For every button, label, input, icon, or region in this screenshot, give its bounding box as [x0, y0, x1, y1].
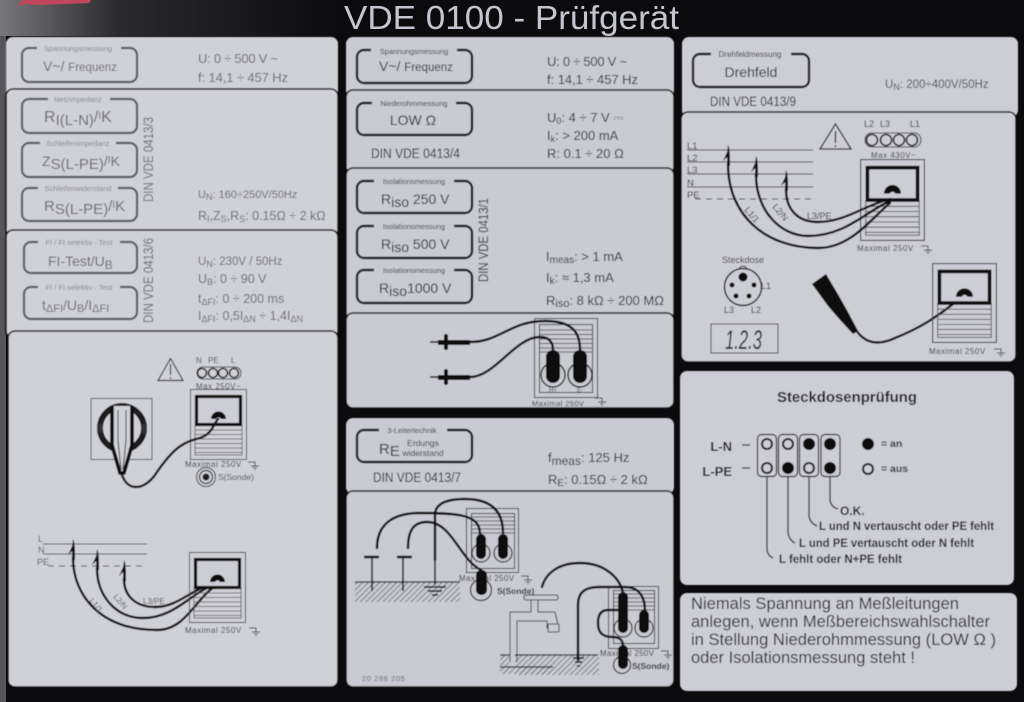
warning text: Niemals Spannung an Meßleitungen — [691, 594, 959, 613]
impedance ranges: U — [198, 189, 206, 201]
connector sockets: N — [196, 356, 202, 365]
red sticker remnant — [17, 0, 91, 6]
button: Riso 1000 V — [357, 266, 472, 303]
meter back: H+ — [549, 388, 557, 394]
button: RI — [22, 95, 137, 133]
button: Riso 250 V: R — [381, 191, 391, 207]
meter rating label: Maximal 250V — [929, 347, 986, 356]
button: Riso 1000 V: R — [379, 280, 389, 296]
button: tΔFI: t — [42, 297, 46, 313]
panel: rotary diagram — [681, 112, 1016, 362]
impedance ranges: : 0.15Ω ÷ 2 kΩ — [245, 209, 326, 223]
button: RS — [22, 184, 137, 221]
earth ranges: E — [557, 478, 564, 489]
result texts: L und PE vertauscht oder N fehlt — [799, 538, 974, 550]
meter rating label — [532, 398, 606, 408]
icon: warning triangle — [158, 358, 183, 380]
panel: rotary field — [682, 37, 1018, 117]
lamp legend — [862, 438, 908, 475]
meter rating label — [857, 244, 932, 254]
result texts — [779, 504, 994, 566]
impedance ranges: ,R — [227, 209, 239, 223]
left column — [6, 37, 338, 687]
button: Riso 500 V — [357, 222, 472, 258]
meter front — [190, 552, 246, 622]
part number: 20 286 205 — [362, 674, 406, 683]
button: RS: S(L-PE) — [55, 201, 108, 218]
meter rating label: Maximal 250V — [185, 460, 242, 469]
button: RI: I(L-N) — [56, 112, 94, 129]
rotary voltage range: : 200÷400V/50Hz — [900, 79, 989, 91]
button: ZS: Z — [42, 153, 51, 169]
phase sequence display — [711, 324, 778, 355]
low ohm ranges: U — [547, 110, 556, 125]
FI ranges: U — [198, 256, 206, 268]
meter back: E- — [577, 388, 583, 394]
insulation ranges: I — [546, 249, 550, 264]
indicator lamp columns — [758, 434, 840, 476]
panel: FI test — [6, 230, 338, 338]
probe socket right — [614, 645, 669, 674]
probe socket right: S(Sonde) — [632, 661, 669, 671]
warning triangle — [820, 124, 851, 149]
button: Riso 500 V: 500 V — [409, 236, 450, 252]
button: RE: 3-Leitertechnik — [387, 426, 437, 435]
panel: low ohm — [346, 90, 674, 174]
button: V~/Frequenz: Spannungsmessung — [44, 44, 112, 53]
meter rating label: Maximal 250V — [185, 626, 242, 635]
test clips and leads: L2/N — [770, 202, 790, 223]
test clips and leads: L3/PE — [143, 597, 165, 606]
lamp legend: = aus — [881, 463, 908, 475]
earth ranges: R — [548, 472, 557, 487]
warning text: oder Isolationsmessung steht ! — [691, 648, 915, 667]
insulation ranges: meas — [550, 255, 574, 266]
row labels — [702, 439, 750, 479]
rotary voltage range: N — [893, 82, 900, 92]
button: tΔFI: ΔFI — [92, 303, 109, 315]
insulation ranges: : ≈ 1,3 mA — [555, 270, 614, 285]
connector sockets — [864, 119, 921, 160]
panel: voltage measurement left — [6, 37, 338, 97]
button: V~/Frequenz: V~/ Frequenz — [43, 58, 117, 74]
panel: socket test — [680, 371, 1014, 585]
test clips and leads — [68, 539, 214, 630]
warning text: anlegen, wenn Meßbereichswahlschalter — [691, 612, 990, 631]
meter back — [466, 508, 518, 572]
mains conductors: PE — [687, 190, 700, 201]
button: RE: R — [379, 441, 390, 458]
insulation ranges: R — [546, 293, 555, 308]
insulation ranges: k — [550, 276, 556, 287]
meter front — [861, 160, 924, 240]
meter rating label — [600, 649, 672, 659]
button: tΔFI: /I — [84, 297, 92, 313]
connector sockets: L — [231, 356, 236, 365]
button: RE: widerstand — [401, 448, 444, 458]
cable from plug to meter — [122, 419, 218, 487]
panel: left diagrams — [8, 331, 338, 687]
title: VDE 0100 - Prüfgerät — [344, 0, 679, 36]
earth ranges: f — [548, 450, 552, 465]
connector sockets: PE — [208, 356, 219, 365]
panel: insulation — [346, 168, 674, 320]
test clips and leads: L2/N — [111, 593, 129, 611]
mains conductors: L2 — [687, 153, 698, 164]
right column — [680, 37, 1018, 691]
low ohm ranges: k — [551, 134, 556, 144]
connector sockets — [196, 356, 241, 391]
probe socket left — [470, 570, 534, 600]
faucet — [510, 595, 559, 662]
probe socket left: S(Sonde) — [497, 586, 534, 596]
impedance ranges: R — [198, 209, 207, 223]
mains conductors: N — [687, 178, 694, 189]
mains conductors: L — [38, 534, 43, 544]
heading: Steckdosenprüfung — [777, 390, 917, 406]
panel: warning note — [680, 593, 1017, 691]
mains conductors: L1 — [687, 141, 698, 152]
wall socket front: Steckdose — [722, 255, 764, 265]
FI ranges: : 0 ÷ 90 V — [213, 272, 267, 286]
connector sockets: Max 250V~ — [196, 382, 241, 391]
impedance ranges — [198, 189, 326, 224]
wall socket front: L2 — [751, 305, 761, 315]
insulation ranges — [546, 249, 664, 310]
button: ZS: S(L-PE) — [51, 156, 104, 173]
voltage and frequency ranges: f: 14,1 ÷ 457 Hz — [547, 72, 638, 87]
button: Riso 1000 V: 1000 V — [407, 280, 452, 296]
meter rating label: Maximal 250V — [857, 244, 914, 253]
mains conductors: L3 — [687, 165, 698, 176]
FI ranges: U — [198, 272, 207, 286]
cables left — [377, 499, 503, 570]
FI ranges: t — [198, 292, 201, 306]
standard label 0413/1: DIN VDE 0413/1 — [475, 198, 491, 282]
low ohm ranges: : 4 ÷ 7 V ⎓ — [561, 110, 624, 125]
button: ZS: Schleifenimpedanz — [46, 139, 110, 148]
button: RI: K — [101, 109, 112, 126]
voltage and frequency ranges — [547, 54, 638, 87]
button: RS: K — [115, 198, 125, 215]
impedance ranges: S — [221, 214, 227, 224]
button: Riso 1000 V: iso — [389, 283, 407, 299]
low ohm ranges — [547, 110, 624, 161]
button: RS: R — [44, 198, 55, 215]
test clips and leads: L1/1 — [742, 205, 761, 225]
meter rating label — [459, 574, 532, 584]
mains conductors: PE — [37, 557, 49, 567]
button: V~/Frequenz — [22, 44, 137, 82]
row labels: L-N — [710, 439, 732, 454]
impedance ranges: I — [207, 214, 210, 224]
button: RI: I — [98, 111, 101, 122]
connector sockets: Max 430V~ — [871, 151, 916, 160]
standard label 0413/9: DIN VDE 0413/9 — [710, 93, 796, 109]
insulation ranges: : 8 kΩ ÷ 200 MΩ — [569, 293, 664, 308]
panel: impedance — [6, 89, 338, 237]
button: V~/Frequenz: Spannungsmessung — [380, 47, 448, 56]
FI ranges: : 230V / 50Hz — [213, 256, 283, 268]
button: V~/Frequenz — [357, 46, 472, 83]
button: Riso 500 V: R — [381, 236, 391, 252]
insulation ranges: I — [546, 270, 550, 285]
wall socket front: L3 — [724, 305, 734, 315]
button: ZS: / — [104, 153, 108, 169]
button: RI: R — [44, 109, 56, 126]
row labels: L-PE — [702, 464, 732, 479]
meter rating label: Maximal 250V — [459, 574, 515, 583]
button: LOW Ω: Niederohmmessung — [380, 99, 448, 108]
voltage and frequency ranges — [198, 51, 288, 85]
FI ranges: ÷ 1,4I — [256, 309, 290, 323]
mains conductors — [687, 141, 813, 201]
earth ranges: meas — [552, 454, 581, 468]
FI ranges: : 0 ÷ 200 ms — [216, 292, 284, 306]
worn top-left edge — [0, 0, 340, 36]
ground hatching right — [500, 655, 599, 675]
middle column — [346, 37, 674, 687]
button: RE: E — [390, 443, 400, 460]
button: tΔFI: /U — [63, 297, 77, 313]
earth ranges: : 0.15Ω ÷ 2 kΩ — [564, 472, 648, 487]
low ohm ranges: R: 0.1 ÷ 20 Ω — [547, 146, 624, 161]
impedance ranges: S — [239, 214, 245, 224]
FI ranges — [198, 256, 303, 324]
standard label 0413/4: DIN VDE 0413/4 — [371, 145, 460, 161]
button: ZS: I — [108, 155, 111, 166]
lamp legend: = an — [881, 438, 902, 450]
cables right — [542, 563, 645, 666]
insulation ranges: iso — [555, 298, 569, 310]
meter rating label: Maximal 250V — [532, 399, 584, 408]
button: Riso 1000 V: Isolationsmessung — [383, 266, 445, 275]
low ohm ranges: 0 — [556, 116, 561, 126]
FI ranges: ΔN — [290, 314, 303, 324]
earth ranges — [548, 450, 648, 489]
button: RS: / — [108, 198, 113, 215]
low ohm ranges: I — [547, 128, 551, 143]
leader lines — [767, 477, 838, 558]
button: FI-Test: FI-Test/U — [48, 253, 105, 269]
result texts: L und N vertauscht oder PE fehlt — [819, 521, 994, 533]
meter rating label: Maximal 250V — [600, 649, 655, 658]
FI ranges: ΔN — [243, 314, 256, 324]
FI ranges: I — [198, 309, 201, 323]
button: Riso 250 V — [357, 177, 472, 213]
connector sockets: L3 — [880, 119, 890, 129]
button: RS: Schleifenwiderstand — [44, 184, 112, 193]
impedance ranges: ,Z — [210, 209, 221, 223]
earth ranges: : 125 Hz — [581, 450, 629, 465]
panel: earth resistance — [346, 418, 674, 494]
low ohm ranges: : > 200 mA — [555, 128, 619, 143]
connector sockets: L2 — [864, 119, 874, 129]
button: ZS — [22, 139, 137, 177]
insulation ranges: : > 1 mA — [574, 249, 623, 264]
button: ZS: K — [111, 153, 121, 169]
FI ranges: ΔFI — [201, 314, 216, 324]
meter front — [190, 390, 246, 460]
button: Riso 250 V: Isolationsmessung — [383, 177, 445, 186]
probe socket: S(Sonde) — [218, 472, 254, 482]
meter back — [534, 318, 598, 398]
FI ranges: : 0,5I — [216, 309, 243, 323]
button: RI: / — [94, 109, 99, 126]
panel: voltage measurement — [346, 37, 674, 97]
voltage and frequency ranges: U: 0 ÷ 500 V ~ — [198, 51, 278, 66]
CEE plug — [812, 274, 858, 334]
button: Riso 250 V: 250 V — [409, 191, 450, 207]
test probes — [430, 321, 580, 385]
standard label 0413/3: DIN VDE 0413/3 — [140, 117, 156, 202]
button: RE — [357, 426, 472, 462]
warning text: in Stellung Niederohmmessung (LOW Ω ) — [691, 630, 996, 649]
FI ranges: N — [206, 259, 213, 269]
meter front — [933, 264, 996, 342]
button: LOW Ω: LOW Ω — [390, 112, 436, 128]
impedance ranges: : 160÷250V/50Hz — [212, 189, 297, 201]
standard label 0413/7: DIN VDE 0413/7 — [373, 469, 461, 485]
wall socket with plug — [91, 398, 152, 473]
button: FI-Test — [24, 238, 137, 273]
voltage and frequency ranges: f: 14,1 ÷ 457 Hz — [198, 70, 288, 85]
button: Drehfeld — [693, 50, 809, 87]
meter rating label — [185, 626, 260, 636]
cable from plug — [856, 304, 953, 343]
test clips and leads: L3/PE — [807, 211, 832, 221]
rotary voltage range: U — [885, 79, 893, 91]
button: tΔFI: B — [77, 303, 84, 315]
button: RS: I — [112, 200, 115, 211]
FI ranges: B — [207, 277, 213, 287]
button: RE: Erdungs — [407, 438, 439, 448]
button: Riso 250 V: iso — [391, 194, 409, 210]
test clips and leads: L1/1 — [87, 597, 105, 615]
panel: insulation diagram — [346, 313, 674, 408]
panel: earth diagrams — [346, 491, 674, 687]
button: Drehfeld: Drehfeldmessung — [719, 50, 781, 59]
earth electrodes — [364, 557, 446, 595]
wall socket front — [722, 255, 771, 315]
warning text — [691, 594, 996, 667]
result texts: L fehlt oder N+PE fehlt — [779, 554, 902, 566]
test clips and leads — [723, 145, 890, 248]
button: tΔFI: FI / FI selektiv - Test — [46, 283, 113, 292]
FI ranges: ΔFI — [201, 297, 216, 307]
mains conductors: N — [38, 545, 44, 555]
ground hatching left — [355, 582, 460, 602]
button: V~/Frequenz: V~/ Frequenz — [379, 58, 453, 74]
worn left edge — [0, 36, 6, 702]
probe socket — [196, 468, 254, 486]
meter rating label — [929, 347, 1005, 357]
button: Drehfeld: Drehfeld — [725, 64, 777, 80]
button: LOW Ω — [357, 99, 472, 135]
phase sequence display: 1.2.3 — [725, 325, 762, 355]
meter rating label — [185, 460, 259, 470]
impedance ranges: N — [206, 192, 212, 202]
button: Riso 500 V: iso — [391, 239, 409, 255]
connector sockets: L1 — [910, 119, 920, 129]
meter back — [608, 586, 658, 648]
button: tΔFI: ΔFI — [46, 303, 63, 315]
button: FI-Test: B — [105, 258, 113, 272]
result texts: O.K. — [840, 504, 865, 518]
standard label 0413/6: DIN VDE 0413/6 — [140, 238, 156, 323]
button: FI-Test: FI / FI selektiv - Test — [46, 238, 113, 247]
wall socket front: L1 — [761, 281, 771, 291]
mains conductors — [37, 534, 147, 567]
button: tΔFI — [24, 283, 137, 319]
button: RI: Netzimpedanz — [54, 95, 102, 104]
button: Riso 500 V: Isolationsmessung — [383, 222, 445, 231]
voltage and frequency ranges: U: 0 ÷ 500 V ~ — [547, 54, 627, 69]
